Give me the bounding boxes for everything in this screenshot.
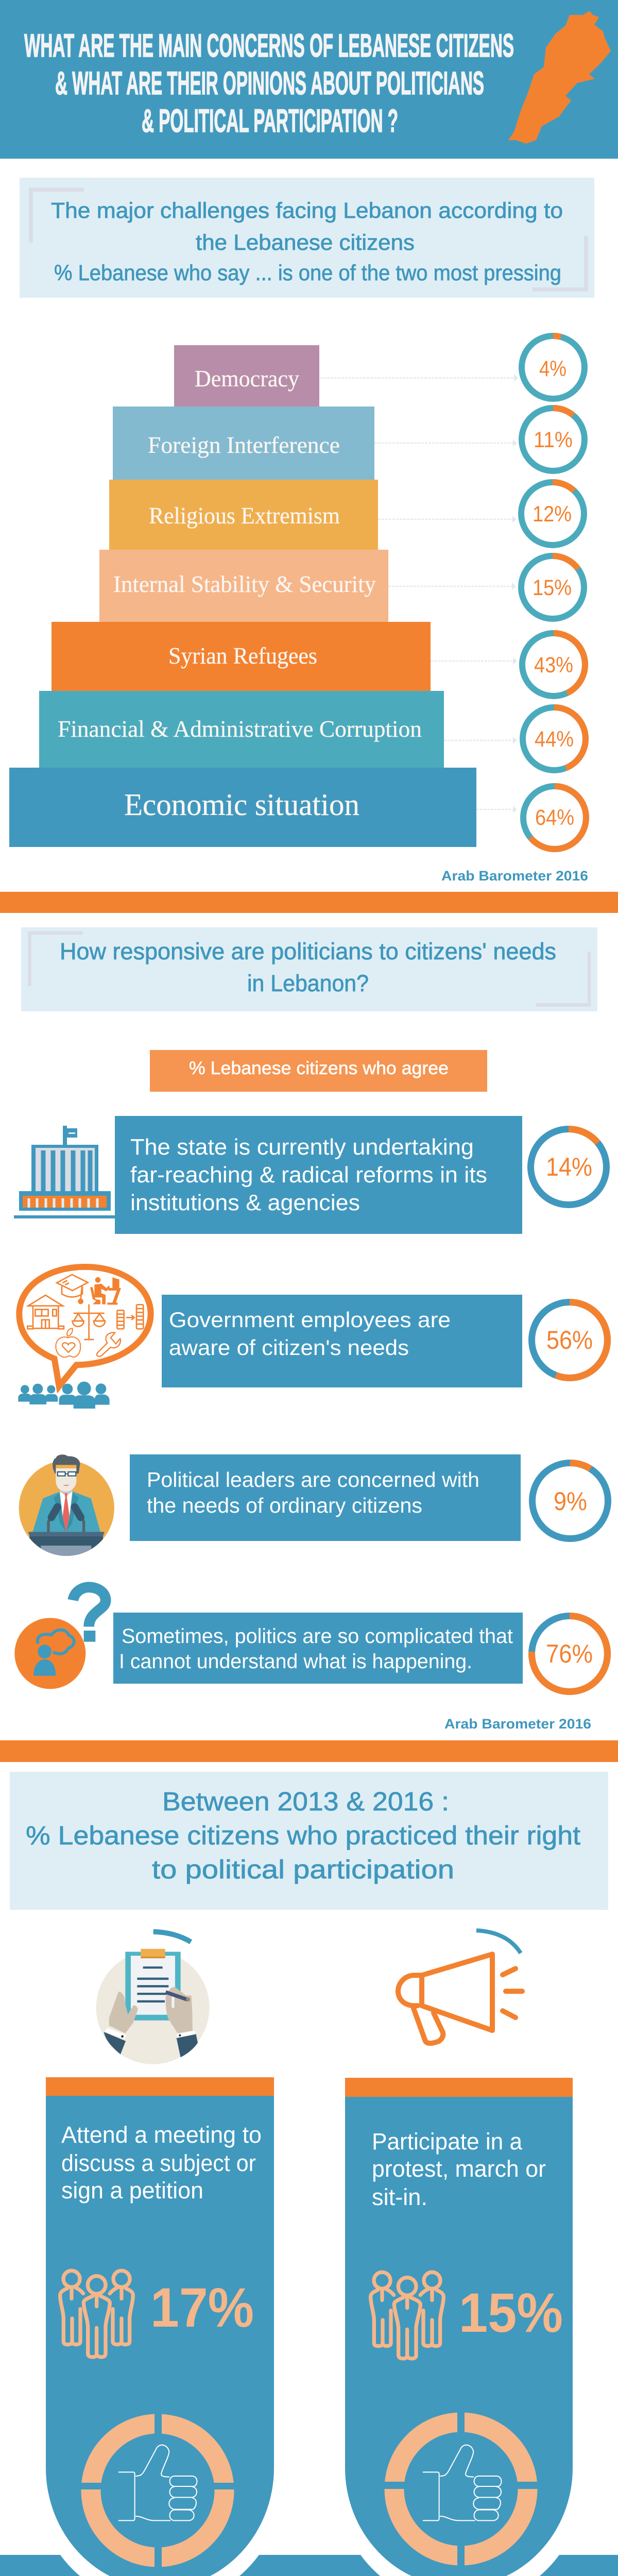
icon: people [60, 2270, 133, 2357]
icon: speech bubble with public services [18, 1267, 151, 1409]
statement: reforms [115, 1116, 522, 1234]
heading text: the Lebanese citizens [196, 230, 415, 255]
heading text: The major challenges facing Lebanon according to [51, 198, 563, 223]
main title [24, 28, 514, 139]
tier: Internal Stability and Security: Internal Stability & Security [113, 571, 376, 597]
crowd [18, 1382, 110, 1409]
column text: sign a petition [61, 2177, 203, 2204]
donut: 14%: 14% [546, 1153, 592, 1181]
statement: reforms: institutions & agencies [130, 1190, 360, 1215]
wrench [97, 1332, 121, 1357]
apple [56, 1328, 80, 1357]
orange divider band 1 [0, 892, 618, 913]
statement: political leaders: Political leaders are concerned with [147, 1468, 479, 1492]
statement: political leaders: the needs of ordinary citizens [147, 1494, 422, 1517]
donut: 44% [523, 707, 586, 770]
column text: sit-in. [372, 2184, 427, 2210]
tier: Foreign Interference [113, 406, 374, 480]
donut: 9% [533, 1463, 608, 1538]
panel: responsiveness heading [21, 927, 597, 1011]
column text: Attend a meeting to [61, 2122, 262, 2148]
column: participate in a protest [345, 2078, 573, 2576]
statement: government employees [162, 1295, 522, 1387]
bottom blue band with white halos [0, 2359, 618, 2576]
ring with thumb up [381, 2410, 541, 2569]
column text: Participate in a [372, 2128, 523, 2155]
donut: 4%: 4% [539, 357, 566, 381]
column text: discuss a subject or [61, 2150, 256, 2176]
tier: Syrian Refugees: Syrian Refugees [168, 642, 317, 669]
donut: 56%: 56% [546, 1326, 593, 1354]
icon: confused citizen with question mark [14, 1587, 106, 1689]
panel: political participation heading: Between 2013 & 2016 : [162, 1787, 449, 1816]
header banner [0, 0, 618, 159]
label: citizens who agree [150, 1050, 487, 1092]
icon: people [371, 2272, 443, 2359]
connector arrows [320, 374, 518, 813]
tier: Religious Extremism: Religious Extremism [149, 502, 340, 529]
desk worker [90, 1277, 121, 1304]
donut: 76% [531, 1616, 608, 1692]
donut: 44%: 44% [535, 727, 574, 752]
statement: reforms: The state is currently undertaking [130, 1134, 474, 1160]
heading text [51, 198, 563, 285]
panel: political participation heading [10, 1772, 608, 1910]
tier: Syrian Refugees [52, 622, 431, 691]
heading text: % Lebanese who say ... is one of the two most pressing [54, 261, 561, 285]
donut: 11% [522, 408, 585, 471]
panel: political participation heading: % Lebanese citizens who practiced their right [26, 1821, 580, 1850]
donut: 43%: 43% [534, 653, 573, 677]
stat 17%: 17% [150, 2276, 254, 2338]
donut: 12% [521, 482, 584, 545]
source note 2: Arab Barometer 2016 [444, 1716, 591, 1732]
statement: government employees: aware of citizen's needs [169, 1335, 409, 1360]
statement: politics too complicated [113, 1613, 523, 1684]
heading text: in Lebanon? [247, 970, 369, 996]
tier: Democracy [174, 345, 319, 406]
label: citizens who agree: % Lebanese citizens who agree [189, 1058, 449, 1078]
panel: political participation heading: to political participation [152, 1855, 454, 1884]
source note 1: Arab Barometer 2016 [441, 868, 588, 884]
pyramid chart of challenges [9, 345, 476, 847]
column text: protest, march or [372, 2156, 546, 2182]
donut: 15% [521, 556, 584, 619]
donut: 43% [522, 633, 585, 696]
column: attend a meeting [46, 2077, 274, 2576]
donut: 76%: 76% [546, 1639, 593, 1668]
donut: 14% [530, 1129, 607, 1205]
column text [372, 2128, 546, 2210]
coins [117, 1304, 143, 1329]
tier: Internal Stability and Security [99, 550, 388, 622]
tier: Financial and Administrative Corruption: Financial & Administrative Corruption [58, 716, 422, 742]
main title: & POLITICAL PARTICIPATION ? [142, 103, 398, 139]
donut: 11%: 11% [534, 428, 573, 452]
heading text: How responsive are politicians to citizens' needs [60, 938, 556, 964]
statement: reforms: far-reaching & radical reforms in its [130, 1162, 487, 1188]
donut: 64%: 64% [535, 805, 574, 830]
donut: 15%: 15% [533, 575, 572, 600]
statement: politics too complicated: I cannot understand what is happening. [119, 1650, 472, 1673]
tier: Religious Extremism [109, 480, 378, 550]
ring with thumb up [77, 2411, 237, 2571]
heading text [60, 938, 556, 996]
orange divider band 2 [0, 1740, 618, 1762]
icon: megaphone [398, 1930, 522, 2043]
statement: politics too complicated: Sometimes, politics are so complicated that [122, 1625, 513, 1648]
tier: Economic situation [9, 768, 476, 847]
donut: 9%: 9% [554, 1487, 587, 1516]
statement: government employees: Government employees are [169, 1308, 451, 1332]
donut: 56% [531, 1302, 608, 1378]
column text [61, 2122, 262, 2204]
icon: clipboard and hands [96, 1931, 210, 2064]
map of Lebanon [508, 11, 611, 144]
tier: Foreign Interference: Foreign Interference [148, 432, 340, 458]
donut: 64% [523, 786, 586, 849]
panel: major challenges heading [20, 178, 594, 298]
statement: political leaders [130, 1454, 521, 1541]
icon: government building [14, 1126, 115, 1218]
donut: 4% [522, 336, 585, 399]
scales [73, 1304, 105, 1340]
tier: Financial and Administrative Corruption [39, 691, 444, 768]
stat 15%: 15% [459, 2281, 563, 2344]
donut: 12%: 12% [533, 502, 572, 527]
house [27, 1295, 64, 1329]
graduation cap [57, 1275, 88, 1303]
icon: politician at podium [19, 1454, 114, 1556]
tier: Democracy: Democracy [195, 365, 299, 392]
tier: Economic situation: Economic situation [124, 788, 359, 822]
